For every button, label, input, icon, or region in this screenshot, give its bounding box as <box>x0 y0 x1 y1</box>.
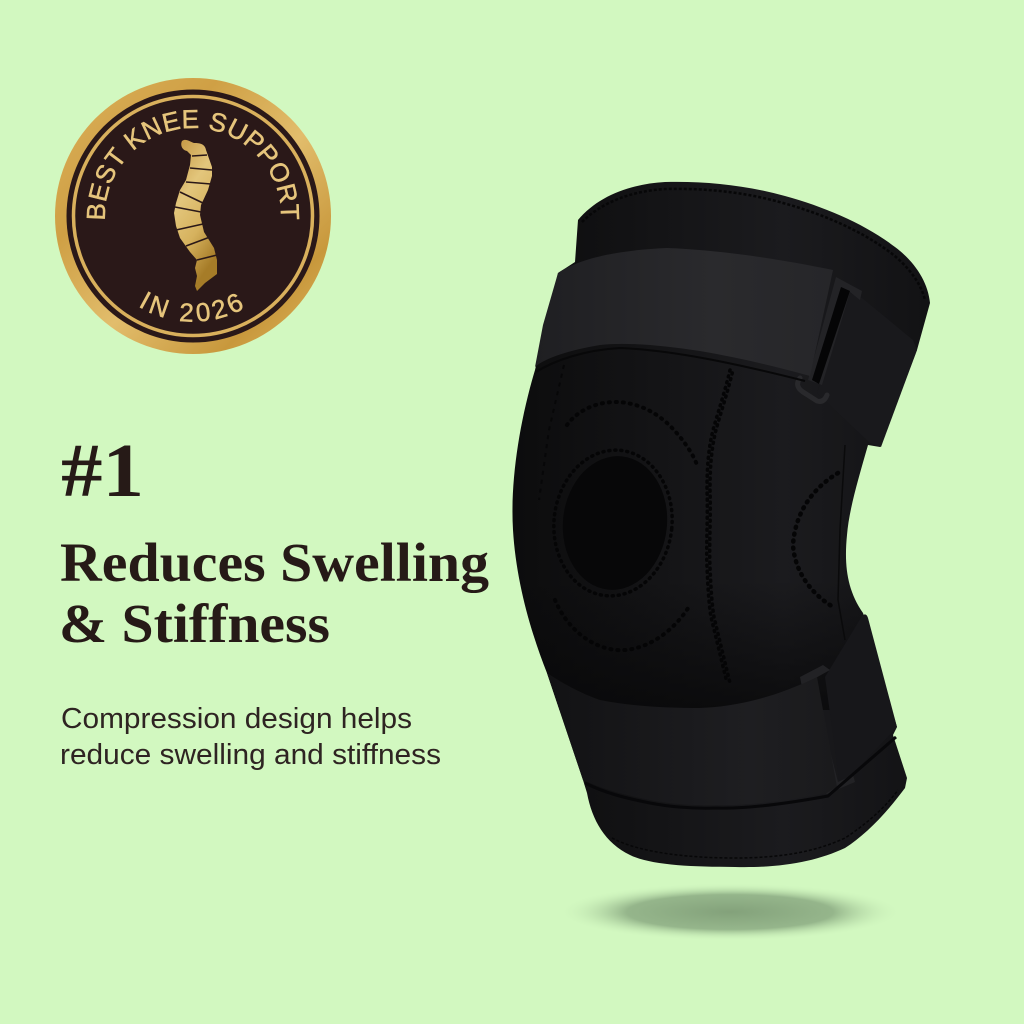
lower strap buckle <box>800 665 855 794</box>
badge: best knee support in 2026 <box>55 78 331 354</box>
right seam <box>838 445 845 640</box>
icon: golden spine <box>174 140 217 291</box>
kneecap opening stitching <box>547 444 679 602</box>
upper strap buckle <box>808 277 862 385</box>
sleeve shading above lower strap <box>525 604 864 710</box>
description line 2: reduce swelling and stiffness <box>60 739 441 771</box>
brace sleeve body <box>512 182 930 867</box>
lower strap band <box>547 673 837 805</box>
description line 1: Compression design helps <box>61 703 412 735</box>
badge inner gold ring <box>74 96 312 336</box>
kneecap outer pad stitching <box>555 402 697 650</box>
headline line 2: & Stiffness <box>59 593 330 654</box>
bottom hem stitching <box>612 790 898 858</box>
upper strap slot <box>812 287 850 384</box>
upper strap buckle lower loop <box>798 378 827 401</box>
upper strap tail <box>817 293 917 447</box>
headline <box>59 532 489 654</box>
lower strap bottom shadow edge <box>585 737 896 808</box>
floor shadow <box>558 883 902 941</box>
top hem stitching <box>582 189 925 300</box>
upper strap lower edge <box>536 348 805 381</box>
headline line 1: Reduces Swelling <box>60 532 489 593</box>
rank number: #1 <box>61 429 144 513</box>
left seam stitching <box>539 365 564 500</box>
knee brace product <box>510 182 930 867</box>
central seam stitching <box>707 370 730 683</box>
badge dark disc <box>66 90 320 342</box>
infographic canvas <box>55 78 930 937</box>
right pad stitching <box>793 473 838 608</box>
central seam second row <box>710 370 733 683</box>
lower strap tail <box>825 614 897 787</box>
badge bottom text: IN 2026 <box>140 291 242 322</box>
spine vertebra divisions <box>175 155 217 260</box>
upper strap band <box>535 248 833 376</box>
description <box>60 703 441 771</box>
badge top text: BEST KNEE SUPPORT <box>86 110 300 220</box>
badge gold rim <box>55 78 331 354</box>
kneecap opening <box>556 451 674 595</box>
